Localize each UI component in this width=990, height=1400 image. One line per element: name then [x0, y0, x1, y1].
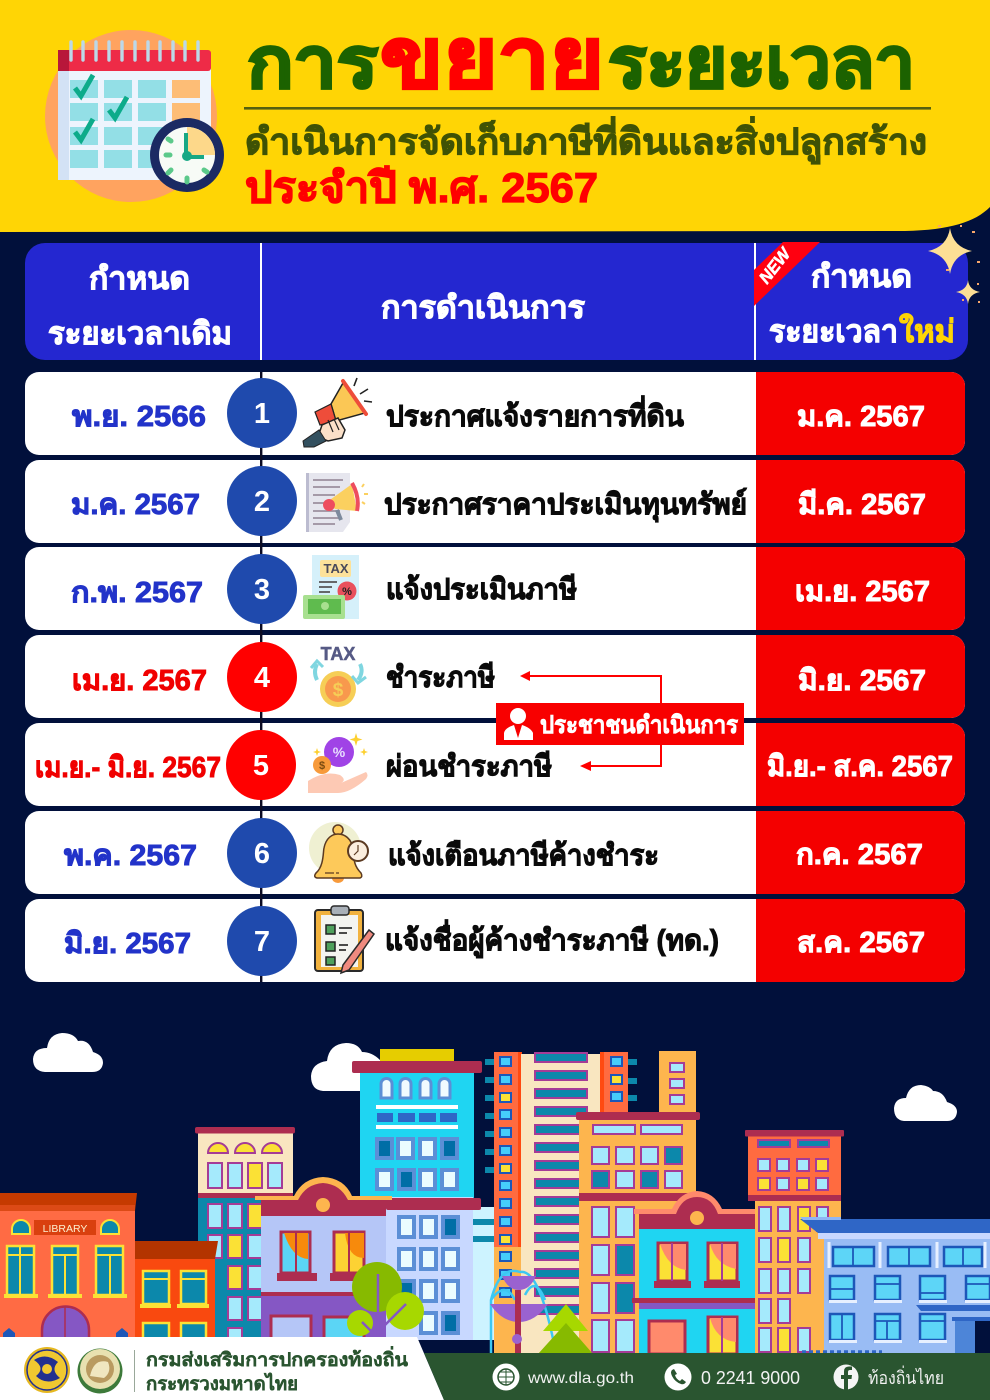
original dates: มิ.ย. 2567 — [64, 928, 191, 960]
tree — [347, 1262, 424, 1340]
new dates: ม.ค. 2567 — [797, 401, 925, 433]
row 7 — [25, 899, 965, 982]
cyan tower — [352, 1049, 494, 1340]
row 1 — [25, 372, 965, 455]
logo: ministry seal — [78, 1348, 122, 1394]
subtitle: ดำเนินการจัดเก็บภาษีที่ดินและสิ่งปลูกสร้าง — [245, 116, 927, 165]
lavender building — [255, 1177, 392, 1340]
library: LIBRARY — [43, 1223, 87, 1235]
row 6 — [25, 811, 965, 894]
row 4 — [25, 635, 965, 718]
heading: new schedule — [769, 259, 955, 349]
step circles: 1 — [254, 398, 270, 430]
title: ขยาย — [380, 11, 604, 105]
step circles: 4 — [254, 662, 270, 694]
step names: ผ่อนชำระภาษี — [386, 751, 552, 783]
pine tree — [538, 1304, 593, 1354]
subtitle year: ประจำปี พ.ศ. 2567 — [245, 164, 598, 211]
callout: citizens act — [496, 671, 744, 771]
icon: tax bill — [303, 555, 359, 619]
original dates: เม.ย. 2567 — [72, 665, 207, 697]
icon: hand with coins: % — [333, 744, 346, 760]
red-orange apartment — [745, 1130, 844, 1354]
step circles: 2 — [254, 486, 270, 518]
new dates: ส.ค. 2567 — [797, 927, 925, 959]
schedule rows — [25, 372, 965, 982]
title: ระยะเวลา — [608, 24, 915, 102]
heading: new schedule: กำหนด — [811, 259, 912, 294]
icon: hand with coins: $ — [319, 760, 325, 772]
new dates — [767, 401, 953, 959]
row 2 — [25, 460, 965, 543]
contact: facebook — [834, 1364, 944, 1390]
step circles — [226, 378, 297, 976]
new ribbon: NEW — [755, 243, 796, 287]
title — [247, 11, 915, 105]
new dates: มิ.ย.- ส.ค. 2567 — [767, 751, 953, 783]
contact: phone: 0 2241 9000 — [701, 1368, 800, 1388]
department name: กรมส่งเสริมการปกครองท้องถิ่น — [146, 1346, 408, 1371]
icon: bell with clock — [309, 822, 368, 883]
step circles: 5 — [253, 750, 269, 782]
original dates: ม.ค. 2567 — [71, 489, 200, 521]
icon: tax coin — [311, 644, 366, 707]
icon: tax coin: $ — [333, 680, 344, 701]
step names: ประกาศแจ้งรายการที่ดิน — [386, 395, 684, 433]
step names: แจ้งชื่อผู้ค้างชำระภาษี (ทด.) — [385, 919, 719, 958]
tall tower — [485, 1052, 637, 1354]
icon: megaphone — [303, 378, 372, 447]
department name: กระทรวงมหาดไทย — [146, 1372, 298, 1395]
original dates: ก.พ. 2567 — [71, 577, 203, 609]
clouds — [33, 1033, 957, 1121]
header banner — [0, 0, 990, 232]
new dates: มิ.ย. 2567 — [798, 665, 926, 697]
heading: original schedule: ระยะเวลาเดิม — [48, 316, 232, 351]
icon: clipboard checklist — [315, 906, 374, 973]
contact: phone — [664, 1364, 800, 1390]
callout: citizens act: ประชาชนดำเนินการ — [540, 712, 738, 739]
step names — [384, 395, 747, 958]
icon: tax bill: % — [342, 586, 352, 598]
new dates: เม.ย. 2567 — [795, 576, 930, 608]
step circles: 7 — [254, 926, 270, 958]
step circles: 3 — [254, 574, 270, 606]
step names: แจ้งเตือนภาษีค้างชำระ — [388, 840, 659, 872]
step names: ชำระภาษี — [386, 662, 495, 694]
icon: sparkles — [928, 226, 980, 304]
blue building — [800, 1217, 990, 1354]
heading: new schedule: ใหม่ — [899, 313, 955, 349]
contact: website — [492, 1364, 634, 1390]
footer — [0, 1337, 990, 1400]
row 3 — [25, 547, 965, 630]
new ribbon — [754, 242, 820, 306]
step names: แจ้งประเมินภาษี — [386, 574, 577, 606]
original dates: พ.ย. 2566 — [72, 401, 206, 433]
icon: tax bill: TAX — [323, 561, 349, 576]
icon: hand with coins — [308, 733, 368, 793]
contact: website: www.dla.go.th — [527, 1370, 634, 1387]
small tower — [659, 1051, 696, 1116]
logo: department seal — [24, 1347, 70, 1393]
cream and teal building — [195, 1127, 295, 1340]
step circles: 6 — [254, 838, 270, 870]
original dates — [35, 401, 221, 960]
new dates: มี.ค. 2567 — [798, 489, 926, 521]
row 5 — [25, 723, 965, 806]
icon: calendar with clock — [45, 30, 224, 202]
heading: original schedule — [48, 261, 232, 351]
icon: tax coin: TAX — [321, 644, 355, 664]
fountain — [490, 1271, 556, 1354]
new dates: ก.ค. 2567 — [796, 839, 923, 871]
heading: original schedule: กำหนด — [89, 261, 190, 296]
heading: operation: การดำเนินการ — [381, 290, 585, 325]
original dates: เม.ย.- มิ.ย. 2567 — [35, 752, 221, 784]
heading: new schedule: ระยะเวลา — [769, 314, 898, 349]
step names: ประกาศราคาประเมินทุนทรัพย์ — [384, 487, 747, 522]
cyan house — [632, 1191, 760, 1354]
icon: document with megaphone — [306, 473, 368, 532]
contact: facebook: ท้องถิ่นไทย — [868, 1365, 944, 1388]
icon: person — [504, 708, 533, 740]
cityscape illustration — [0, 1033, 990, 1354]
orange apartment — [576, 1112, 700, 1354]
library — [0, 1193, 137, 1340]
original dates: พ.ค. 2567 — [64, 840, 197, 872]
table header panel — [25, 226, 980, 360]
orange shop — [135, 1241, 218, 1340]
title: การ — [247, 24, 378, 102]
department name — [146, 1346, 408, 1395]
